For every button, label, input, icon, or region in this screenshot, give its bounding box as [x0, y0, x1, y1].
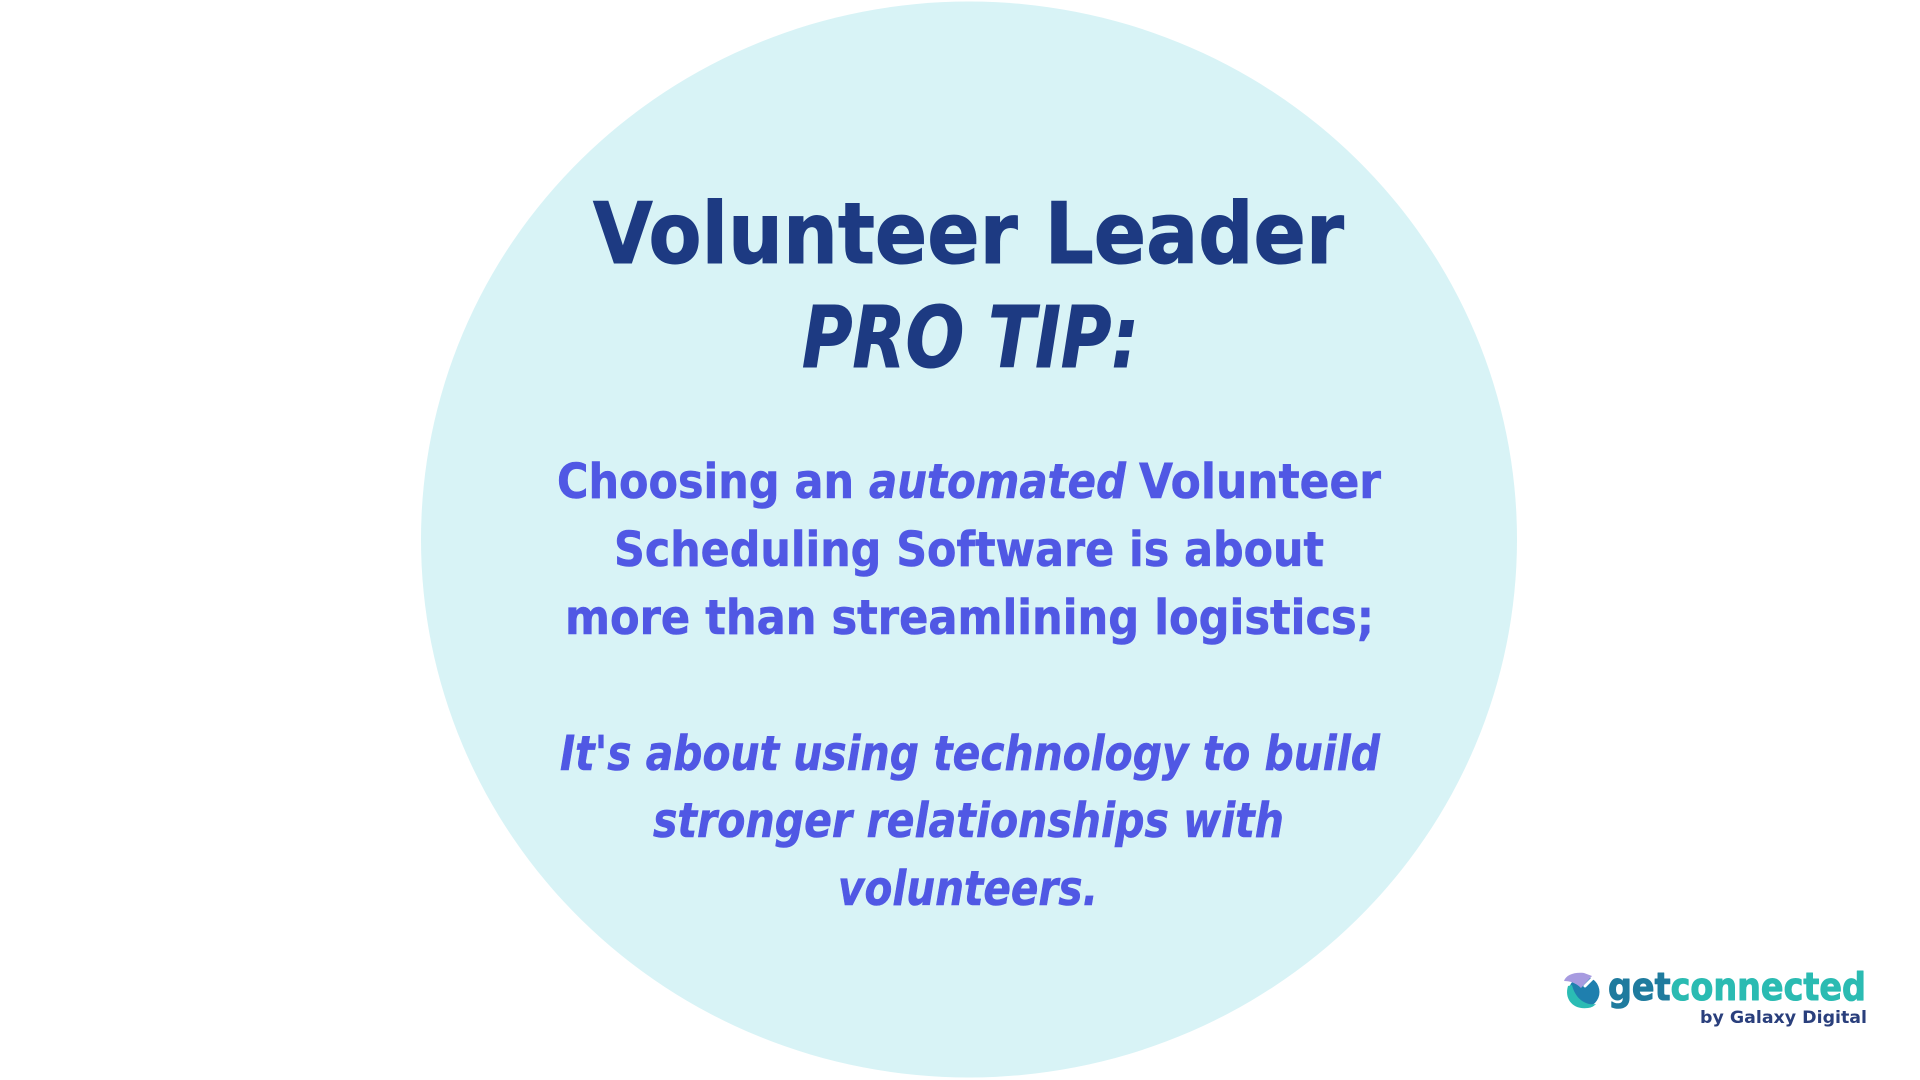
title — [593, 185, 1344, 388]
text block: intro statement: Choosing an — [557, 454, 854, 510]
text block: italic conclusion — [560, 726, 1381, 917]
text block: italic conclusion: stronger relationships with — [653, 793, 1284, 849]
logo: getconnected by Galaxy Digital — [1564, 965, 1867, 1027]
title: PRO TIP: — [802, 289, 1139, 388]
text block: italic conclusion: It's about using technology to build — [560, 726, 1381, 782]
text block: intro statement: more than streamlining logistics; — [565, 590, 1374, 646]
text block: intro statement: automated — [869, 454, 1127, 510]
title: Volunteer Leader — [593, 185, 1344, 284]
text block: intro statement: Scheduling Software is about — [614, 522, 1324, 578]
logo wordmark: getconnected — [1608, 965, 1866, 1009]
logo tagline: by Galaxy Digital — [1700, 1008, 1867, 1027]
text block: italic conclusion: volunteers. — [838, 861, 1098, 917]
text block: intro statement — [557, 454, 1381, 646]
icon: logo globe — [1564, 973, 1600, 1008]
panel: background circle — [421, 2, 1517, 1078]
text block: intro statement: Volunteer — [1139, 454, 1381, 510]
